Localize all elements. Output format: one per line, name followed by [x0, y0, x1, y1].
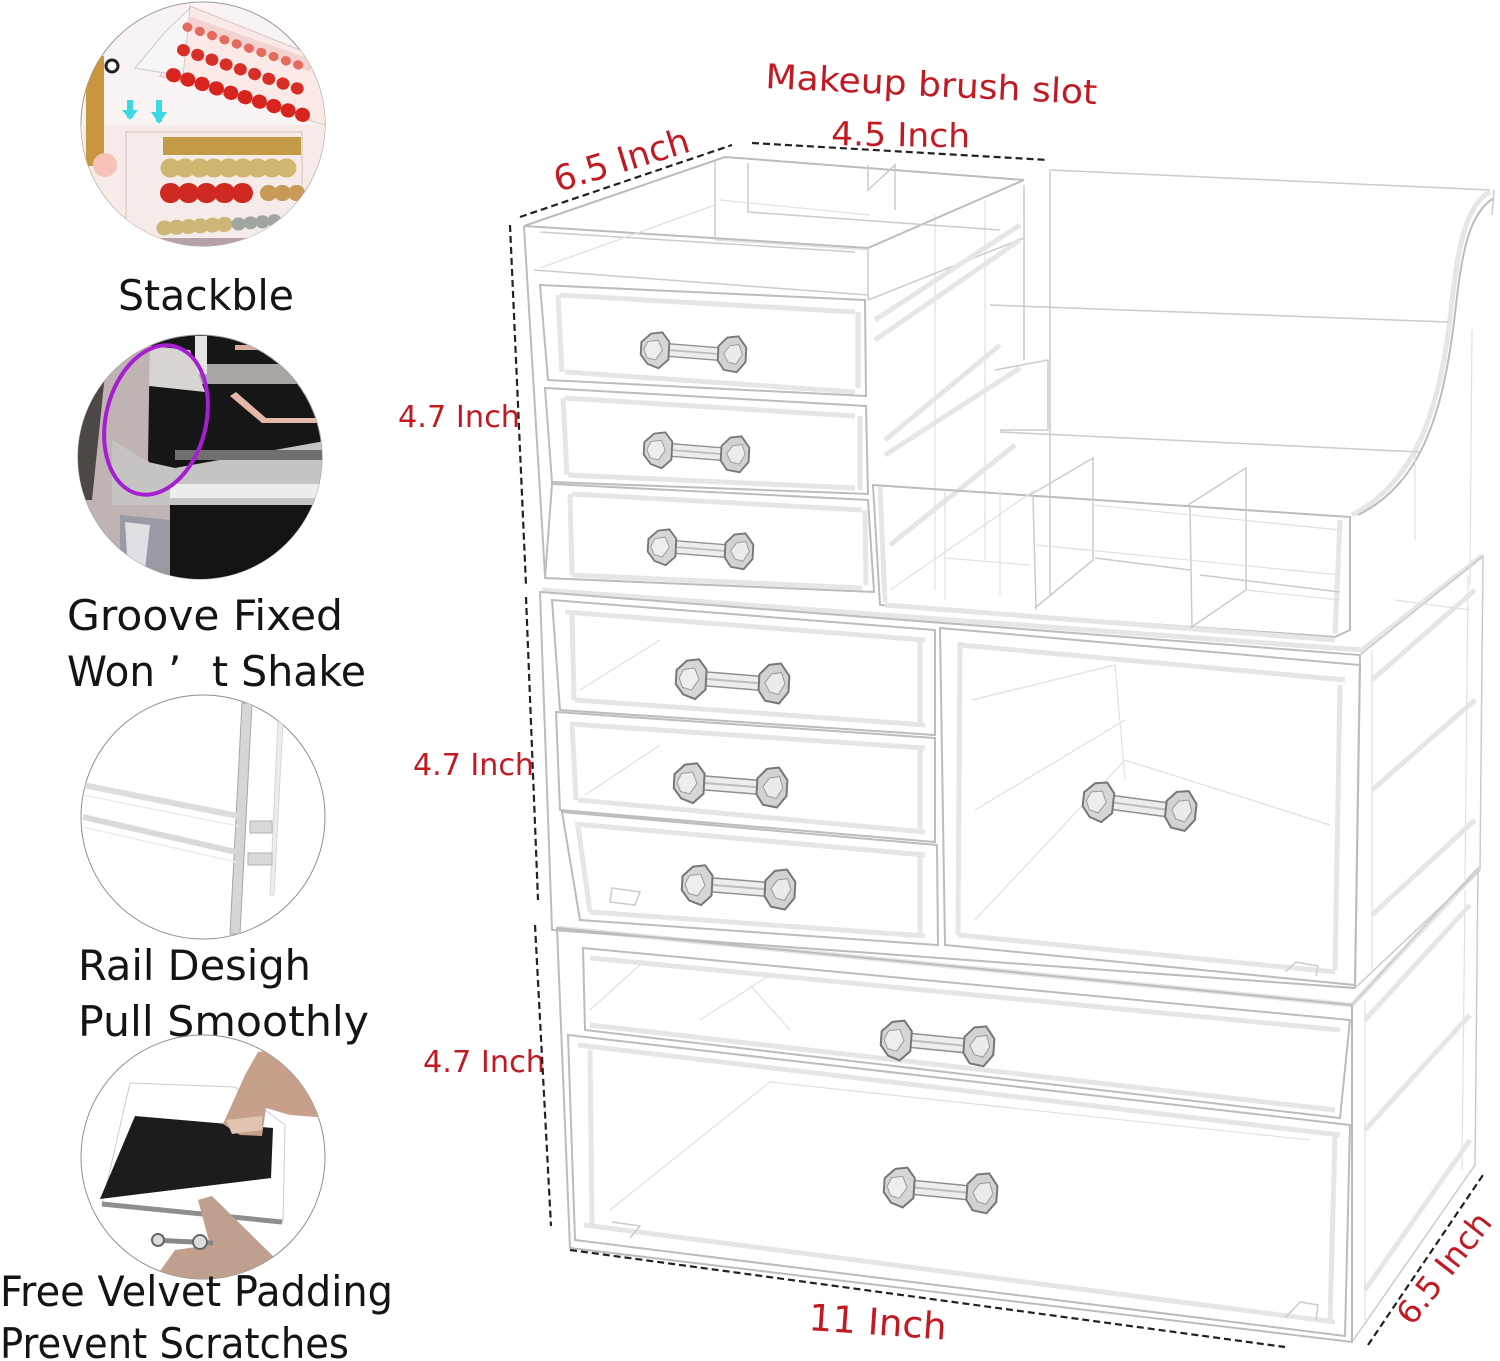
drawer: middle row two [556, 712, 935, 842]
label: 4.7 inch top: 4.7 Inch [398, 400, 520, 435]
drawer: middle row one [552, 600, 935, 735]
label: 11 inch width: 11 Inch [807, 1296, 948, 1349]
label: Makeup brush slot: Makeup brush slot [765, 57, 1098, 113]
drawer: lower wide [568, 1035, 1350, 1336]
heading: Groove Fixed: t Shake [212, 647, 366, 696]
heading: Groove Fixed: Won [67, 647, 155, 696]
drawer: upper wide [583, 948, 1350, 1118]
drawer: top row three [545, 484, 874, 592]
heading: Free Velvet Padding [0, 1267, 393, 1361]
panel: groove photo [76, 334, 330, 581]
side rails [875, 225, 1048, 545]
dimension: bottom width line [570, 1250, 1285, 1347]
heading: Groove Fixed: ’ [168, 647, 181, 696]
dimension: bottom height line [535, 925, 551, 1226]
organizer: top unit [524, 157, 1494, 640]
handle: bottom unit lower [883, 1166, 998, 1214]
heading: Rail Design: Pull Smoothly [78, 997, 369, 1046]
drawer: top row two [545, 388, 868, 494]
handle: top row three [647, 528, 754, 570]
heading: Groove Fixed: Groove Fixed [67, 591, 343, 640]
dimension: middle height line [526, 597, 538, 900]
heading: Stackble: Stackble [118, 271, 294, 320]
label: depth 6.5 inch top: 6.5 Inch [549, 121, 695, 201]
drawer: top row one [540, 285, 866, 396]
label: 4.5 inch width: 4.5 Inch [831, 114, 971, 155]
heading: Rail Design [78, 941, 369, 1046]
compartment: brush slots [873, 458, 1350, 640]
heading: Groove Fixed [67, 591, 366, 696]
drawer: middle row three [562, 812, 938, 945]
handle: bottom unit upper [880, 1019, 995, 1067]
dimension: bottom depth line [1368, 1172, 1485, 1345]
panel: velvet padding photo [81, 1035, 330, 1285]
handle: middle row one [675, 658, 790, 704]
label: 4.7 inch middle: 4.7 Inch [413, 748, 534, 783]
dimension: top depth line [520, 145, 732, 217]
label: 6.5 inch bottom depth: 6.5 Inch [1388, 1205, 1500, 1332]
dimension: top width line [752, 143, 1048, 160]
handle: middle row two [673, 762, 788, 808]
compartment: small-item tray [524, 157, 1024, 575]
handle: tall drawer [1081, 780, 1198, 832]
organizer: bottom unit [557, 868, 1478, 1342]
panel: stackable photo [80, 2, 330, 250]
panel: rail photo [81, 695, 325, 939]
label: 4.7 inch bottom: 4.7 Inch [423, 1045, 545, 1080]
dimension: top height line [510, 225, 526, 585]
handle: top row one [640, 331, 747, 373]
handle: middle row three [681, 864, 796, 910]
handle: top row two [643, 431, 750, 473]
heading: Rail Design: Rail Desigh [78, 941, 311, 990]
heading: Free Velvet Padding: Free Velvet Padding [0, 1267, 393, 1316]
callout: purple ring [89, 334, 223, 506]
drawer: tall right [940, 628, 1360, 985]
organizer: middle unit [540, 556, 1483, 988]
